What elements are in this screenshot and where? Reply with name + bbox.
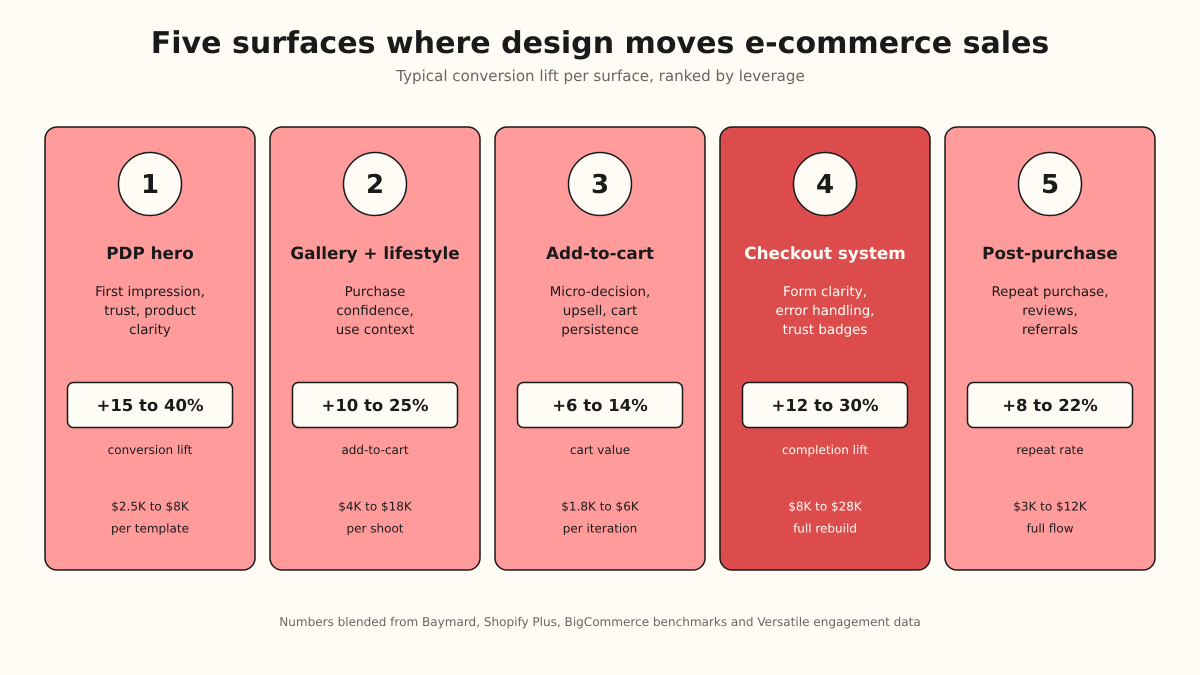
- number badge 1: 1: [141, 170, 159, 200]
- heading: PDP hero: PDP hero: [106, 243, 194, 263]
- description: upsell, cart: [563, 304, 637, 319]
- metric label: add-to-cart: [341, 443, 409, 457]
- cost: per iteration: [563, 522, 637, 536]
- lift value: +8 to 22%: [1002, 396, 1098, 415]
- cost: full flow: [1026, 522, 1074, 536]
- description: confidence,: [336, 304, 414, 319]
- description: Micro-decision,: [550, 285, 650, 300]
- number badge 5: [1018, 152, 1082, 216]
- number badge 1: [118, 152, 182, 216]
- cost: $3K to $12K: [1013, 500, 1088, 514]
- metric label: repeat rate: [1016, 443, 1084, 457]
- lift value: +10 to 25%: [322, 396, 429, 415]
- cost: $4K to $18K: [338, 500, 413, 514]
- lift value: +12 to 30%: [772, 396, 879, 415]
- description: reviews,: [1022, 304, 1078, 319]
- panel: PDP hero: [45, 127, 255, 570]
- cost: full rebuild: [793, 522, 857, 536]
- description: First impression,: [95, 285, 205, 300]
- description: persistence: [561, 323, 639, 338]
- number badge 2: [344, 152, 406, 216]
- description: Form clarity,: [783, 285, 867, 300]
- cost: $2.5K to $8K: [111, 500, 190, 514]
- heading: Add-to-cart: Add-to-cart: [546, 243, 654, 263]
- panel: Add-to-cart: [495, 127, 705, 570]
- title: Five surfaces where design moves e-commerce sales: [151, 26, 1049, 61]
- number badge 3: 3: [591, 170, 609, 200]
- footnote: Numbers blended from Baymard, Shopify Plus, BigCommerce benchmarks and Versatile engagement data: [279, 615, 921, 629]
- panel: Post-purchase: [945, 127, 1155, 570]
- metric label: completion lift: [782, 443, 868, 457]
- number badge 5: 5: [1041, 170, 1059, 200]
- number badge 2: 2: [366, 170, 384, 200]
- cost: $1.8K to $6K: [561, 500, 640, 514]
- description: trust, product: [104, 304, 196, 319]
- lift value: [968, 382, 1132, 428]
- description: clarity: [129, 323, 171, 338]
- lift value: [292, 382, 458, 428]
- metric label: conversion lift: [108, 443, 193, 457]
- panel: Gallery + lifestyle: [270, 127, 480, 570]
- heading: Post-purchase: Post-purchase: [982, 243, 1118, 263]
- lift value: +15 to 40%: [96, 396, 204, 415]
- cost: $8K to $28K: [788, 500, 863, 514]
- subtitle: Typical conversion lift per surface, ranked by leverage: [395, 67, 805, 85]
- description: referrals: [1022, 323, 1078, 338]
- metric label: cart value: [570, 443, 630, 457]
- cost: per template: [111, 522, 189, 536]
- number badge 4: 4: [816, 170, 834, 200]
- lift value: [68, 382, 232, 428]
- lift value: [742, 382, 908, 428]
- number badge 4: [794, 152, 856, 216]
- description: Purchase: [345, 285, 405, 300]
- heading: Checkout system: Checkout system: [744, 243, 906, 263]
- description: use context: [336, 323, 414, 338]
- description: Repeat purchase,: [991, 285, 1109, 300]
- heading: Gallery + lifestyle: Gallery + lifestyle: [290, 243, 460, 263]
- lift value: [518, 382, 682, 428]
- lift value: +6 to 14%: [552, 396, 648, 415]
- cost: per shoot: [346, 522, 404, 536]
- number badge 3: [568, 152, 632, 216]
- description: trust badges: [783, 323, 867, 338]
- description: error handling,: [775, 304, 875, 319]
- panel: Checkout system (highlighted): [720, 127, 930, 570]
